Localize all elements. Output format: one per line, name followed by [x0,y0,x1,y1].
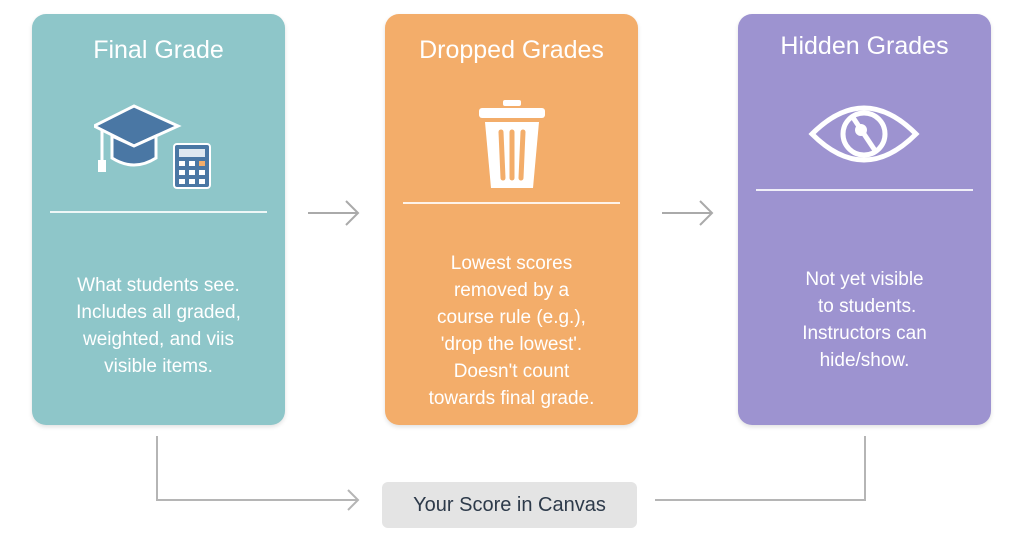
arrow: dropped to hidden [662,200,714,226]
text: dropped grades description: removed by a [454,280,569,301]
icon: trash can [479,100,545,188]
text: hidden grades description: Not yet visible [805,269,924,290]
heading: dropped grades: Dropped Grades [419,36,604,64]
box: your score in canvas [382,482,637,528]
heading: hidden grades: Hidden Grades [780,32,949,60]
panel: hidden grades [738,14,991,425]
text: dropped grades description: 'drop the lowest'. [441,334,582,355]
text: hidden grades description: hide/show. [820,350,909,371]
icon: graduation cap with calculator [94,104,211,189]
arrow: final to dropped [308,200,360,226]
text: dropped grades description [428,253,594,409]
panel: dropped grades [385,14,638,425]
text: dropped grades description: towards final grade. [429,388,594,409]
text: dropped grades description: Lowest scores [451,253,572,274]
text: final grade description: weighted, and viis [83,329,234,350]
text: final grade description: visible items. [104,356,213,377]
text: final grade description: Includes all graded, [76,302,241,323]
text: dropped grades description: course rule (e.g.), [437,307,586,328]
panel: final grade [32,14,285,425]
text: dropped grades description: Doesn't count [454,361,569,382]
heading: final grade: Final Grade [93,36,224,64]
icon: hidden eye [808,106,920,162]
text: hidden grades description: Instructors can [802,323,927,344]
box: your score in canvas: Your Score in Canvas [413,494,606,516]
connector lines to score [156,436,866,511]
text: hidden grades description [802,269,927,371]
text: final grade description [76,275,241,377]
text: hidden grades description: to students. [818,296,916,317]
text: final grade description: What students see. [77,275,240,296]
